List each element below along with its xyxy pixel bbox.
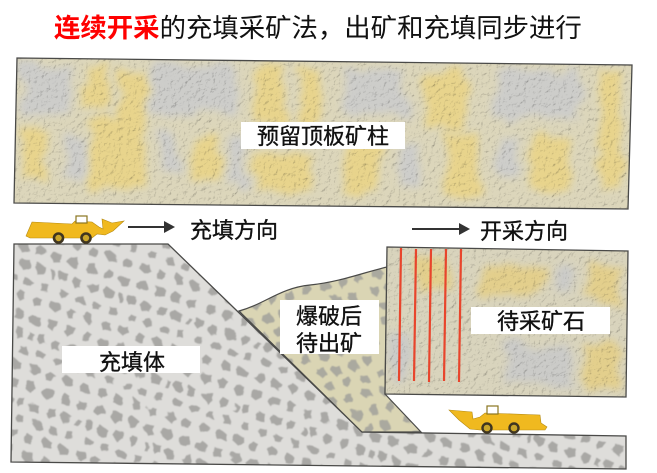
icon: loader on floor	[449, 406, 547, 432]
panel: backfill body	[0, 235, 640, 473]
label: blasted ore: 待出矿	[296, 331, 362, 356]
icon: loader on backfill	[26, 216, 124, 242]
panel: roof pillar rock	[10, 55, 640, 215]
label: blasted ore: 爆破后	[296, 304, 362, 329]
blast holes	[399, 248, 461, 382]
title: 连续开采的充填采矿法，出矿和充填同步进行	[54, 13, 582, 43]
label: roof pillar: 预留顶板矿柱	[257, 124, 389, 149]
label: backfill direction: 充填方向	[190, 218, 278, 243]
label: blasted ore	[280, 300, 379, 356]
label: ore to mine	[471, 307, 610, 334]
panel: blasted ore pile	[238, 266, 422, 433]
label: mining direction: 开采方向	[480, 219, 568, 244]
arrow: backfill direction	[128, 221, 175, 233]
label: backfill	[62, 346, 200, 375]
label: ore to mine: 待采矿石	[497, 309, 585, 334]
label: backfill: 充填体	[99, 350, 165, 375]
arrow: mining direction	[412, 223, 470, 235]
panel: ore to be mined	[380, 245, 630, 400]
